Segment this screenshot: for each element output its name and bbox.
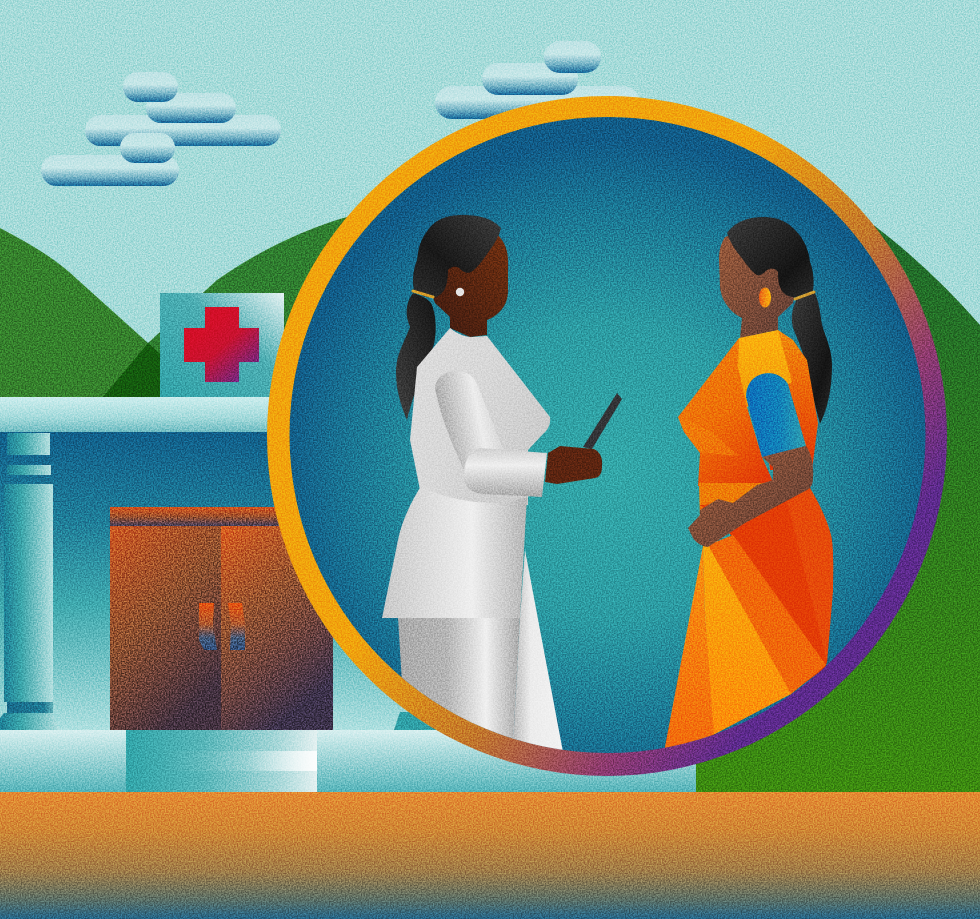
clinic building [0,293,696,792]
entrance steps [126,730,317,792]
front panel [513,550,563,752]
forearm sleeve [464,448,547,497]
plinth [0,730,696,792]
clinic double door [110,507,333,730]
hand [545,446,602,484]
blue sleeve [746,373,806,457]
hill: front left [0,228,208,397]
ground [0,792,980,919]
forearm and hand [688,446,813,547]
saree bodice [678,338,775,486]
earring [759,288,771,308]
right column base [394,712,440,730]
trousers [398,617,520,745]
cloud group: left [41,72,281,186]
roof slab [0,397,290,432]
sign box with red cross [160,293,284,398]
saree waist band [699,483,764,516]
upper arm [435,371,503,472]
face and neck [430,235,508,337]
saree back strip [768,330,818,470]
figure: health worker [382,215,622,752]
door extra grain [110,507,333,730]
hill: back centre [103,216,350,397]
hair tie [795,292,814,299]
ponytail [396,293,436,420]
sky speckle texture [0,0,980,400]
circular portrait ring [267,96,947,776]
left column [0,433,60,730]
face and neck [719,236,794,338]
figures clipped to circle [382,215,833,752]
hill: right [690,215,980,792]
saree skirt folds [664,488,833,752]
hair tie [413,291,433,297]
hill overlap shadow [103,343,208,397]
coat torso [410,328,550,505]
blouse [738,330,792,407]
hair [413,215,501,298]
bust highlight [678,417,739,456]
cloud group: right [435,41,640,119]
phone [583,393,622,449]
figure: patient [664,217,833,752]
tunic skirt [382,486,527,618]
clinic wall [0,432,440,730]
ponytail [792,293,832,424]
pearl earring [456,288,464,296]
circular portrait background [290,117,926,753]
hair [727,217,814,297]
